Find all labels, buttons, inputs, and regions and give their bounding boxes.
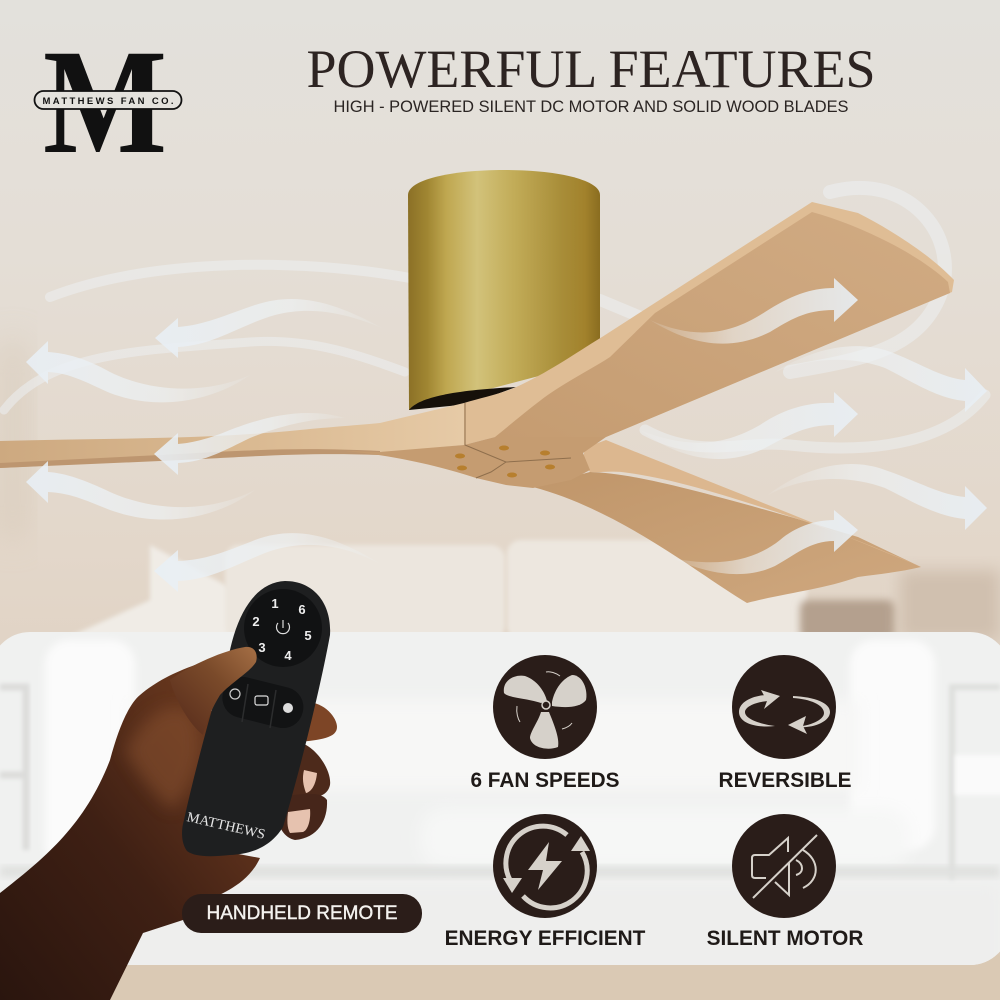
left blade xyxy=(0,403,464,468)
remote control: 3 xyxy=(258,640,266,655)
ceiling fan xyxy=(0,170,954,603)
remote control xyxy=(182,581,330,856)
remote control: 4 xyxy=(284,648,292,663)
arrow: left lower xyxy=(154,533,382,592)
arrow: left middle xyxy=(154,413,345,475)
handheld remote label: HANDHELD REMOTE xyxy=(206,903,398,924)
arrow: right upper xyxy=(650,278,858,344)
feature: reversible xyxy=(719,655,852,792)
arrow: left upper xyxy=(155,299,382,358)
arrow: far left lower xyxy=(26,461,255,520)
logo: MATTHEWS FAN CO. xyxy=(42,96,174,107)
arrow: far right upper xyxy=(775,346,987,412)
handheld remote label xyxy=(182,894,422,933)
icon: fan xyxy=(493,655,597,759)
feature: silent motor: SILENT MOTOR xyxy=(707,927,863,950)
feature: silent motor xyxy=(707,814,863,950)
feature: energy efficient xyxy=(445,814,646,950)
remote control: 6 xyxy=(298,602,306,617)
icon: muted speaker xyxy=(732,814,836,918)
logo: M xyxy=(43,19,167,185)
subtitle: HIGH - POWERED SILENT DC MOTOR AND SOLID WOOD BLADES xyxy=(334,98,848,116)
feature: 6 fan speeds: 6 FAN SPEEDS xyxy=(470,769,620,792)
hand holding remote xyxy=(0,581,337,1000)
airflow arrows xyxy=(26,278,987,592)
feature: 6 fan speeds xyxy=(470,655,620,792)
airflow behind fan xyxy=(4,188,985,448)
feature: reversible: REVERSIBLE xyxy=(719,769,852,792)
feature: energy efficient: ENERGY EFFICIENT xyxy=(445,927,646,950)
remote control: 5 xyxy=(304,628,312,643)
arrow: far left upper xyxy=(26,341,250,402)
arrow: right middle xyxy=(640,392,858,459)
brass canopy xyxy=(408,170,600,410)
panel: frosted features xyxy=(0,632,1000,975)
arm and palm xyxy=(0,665,260,1000)
title: POWERFUL FEATURES xyxy=(306,39,876,99)
lower right blade xyxy=(533,440,921,603)
remote control: 2 xyxy=(252,614,260,629)
arrow: right lower xyxy=(672,510,858,574)
blade hub xyxy=(345,403,606,488)
remote control: 1 xyxy=(271,596,279,611)
icon: energy bolt xyxy=(493,814,597,918)
arrow: far right lower xyxy=(768,464,987,530)
upper right blade xyxy=(464,202,954,445)
icon: reverse arrows xyxy=(732,655,836,759)
remote control: MATTHEWS xyxy=(185,810,267,843)
thumb xyxy=(170,647,257,735)
fingers behind remote xyxy=(277,702,337,840)
